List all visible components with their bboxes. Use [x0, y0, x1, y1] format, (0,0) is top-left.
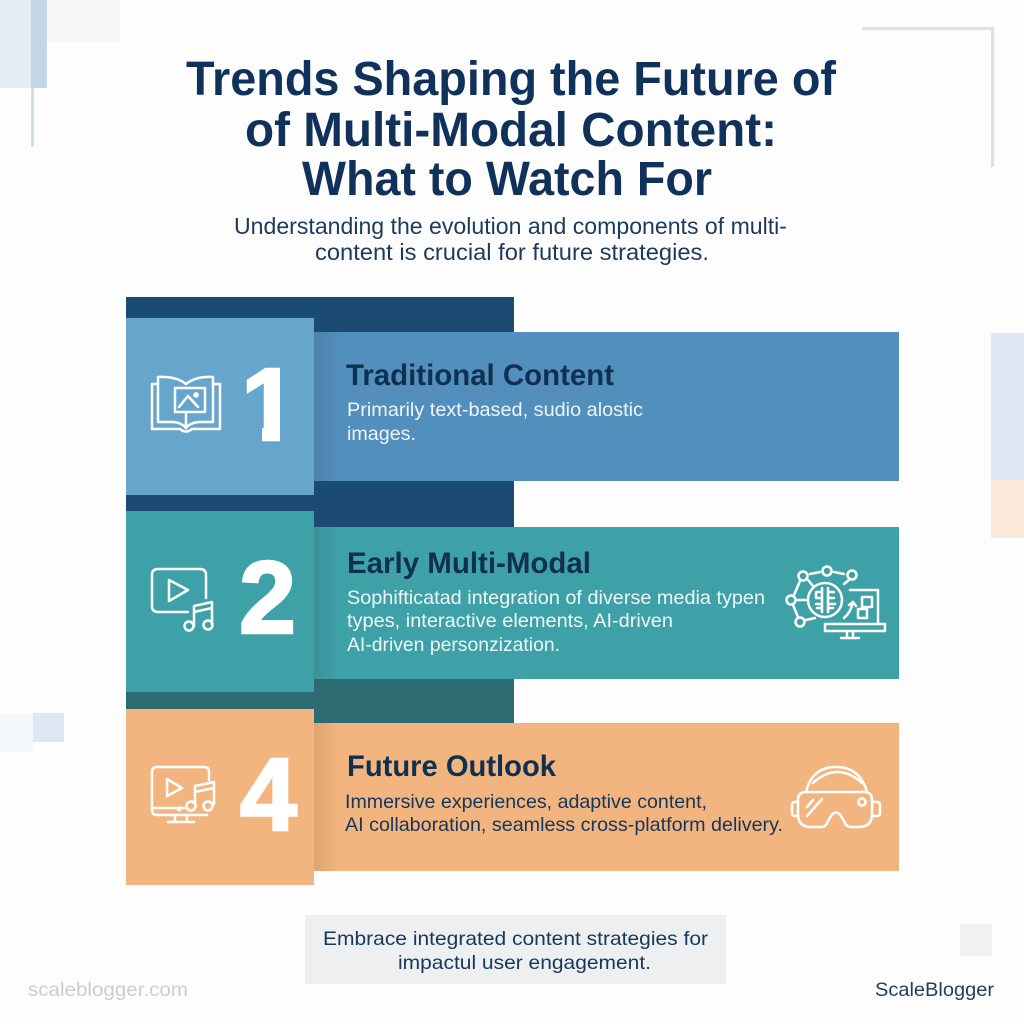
subtitle — [234, 213, 787, 265]
footer: website: scaleblogger.com — [28, 979, 188, 1001]
description: Immersive experiences, adaptive content, — [345, 791, 707, 813]
description: Sophifticatad integration of diverse media typen — [347, 587, 765, 609]
icon: monitor with video and music — [152, 767, 214, 822]
icon: book with picture — [152, 377, 220, 432]
description: types, interactive elements, AI-driven — [347, 610, 673, 632]
callout: impactul user engagement. — [398, 952, 651, 974]
description: AI collaboration, seamless cross-platform delivery. — [345, 814, 783, 836]
backing block: navy and dark teal — [126, 297, 514, 723]
footer: brand: ScaleBlogger — [875, 979, 995, 1001]
callout: Embrace integrated content strategies for — [323, 928, 709, 950]
heading: Early Multi-Modal — [347, 547, 591, 580]
icon: AI brain network and monitor — [786, 566, 885, 638]
title — [186, 53, 837, 206]
heading: Future Outlook — [347, 750, 556, 783]
subtitle: Understanding the evolution and components of multi- — [234, 213, 787, 239]
description — [345, 791, 783, 836]
callout — [305, 915, 726, 984]
heading: Traditional Content — [346, 359, 614, 392]
icon: video and music — [152, 569, 212, 630]
description — [347, 587, 765, 656]
subtitle: content is crucial for future strategies. — [315, 239, 709, 265]
description: AI-driven personzization. — [347, 634, 560, 656]
description: Primarily text-based, sudio alostic — [347, 399, 643, 421]
panel: early multi-modal — [126, 511, 899, 692]
panel: future outlook — [126, 709, 899, 885]
icon: VR goggles — [792, 767, 880, 827]
number 4: 4 — [240, 737, 297, 852]
title: of Multi-Modal Content: — [245, 104, 777, 157]
title: What to Watch For — [302, 153, 712, 206]
number 1: 1 — [241, 347, 298, 462]
panel: traditional content — [126, 318, 899, 495]
title: Trends Shaping the Future of — [186, 53, 837, 106]
number 2: 2 — [239, 540, 296, 655]
description: images. — [347, 423, 416, 445]
description — [347, 399, 643, 445]
